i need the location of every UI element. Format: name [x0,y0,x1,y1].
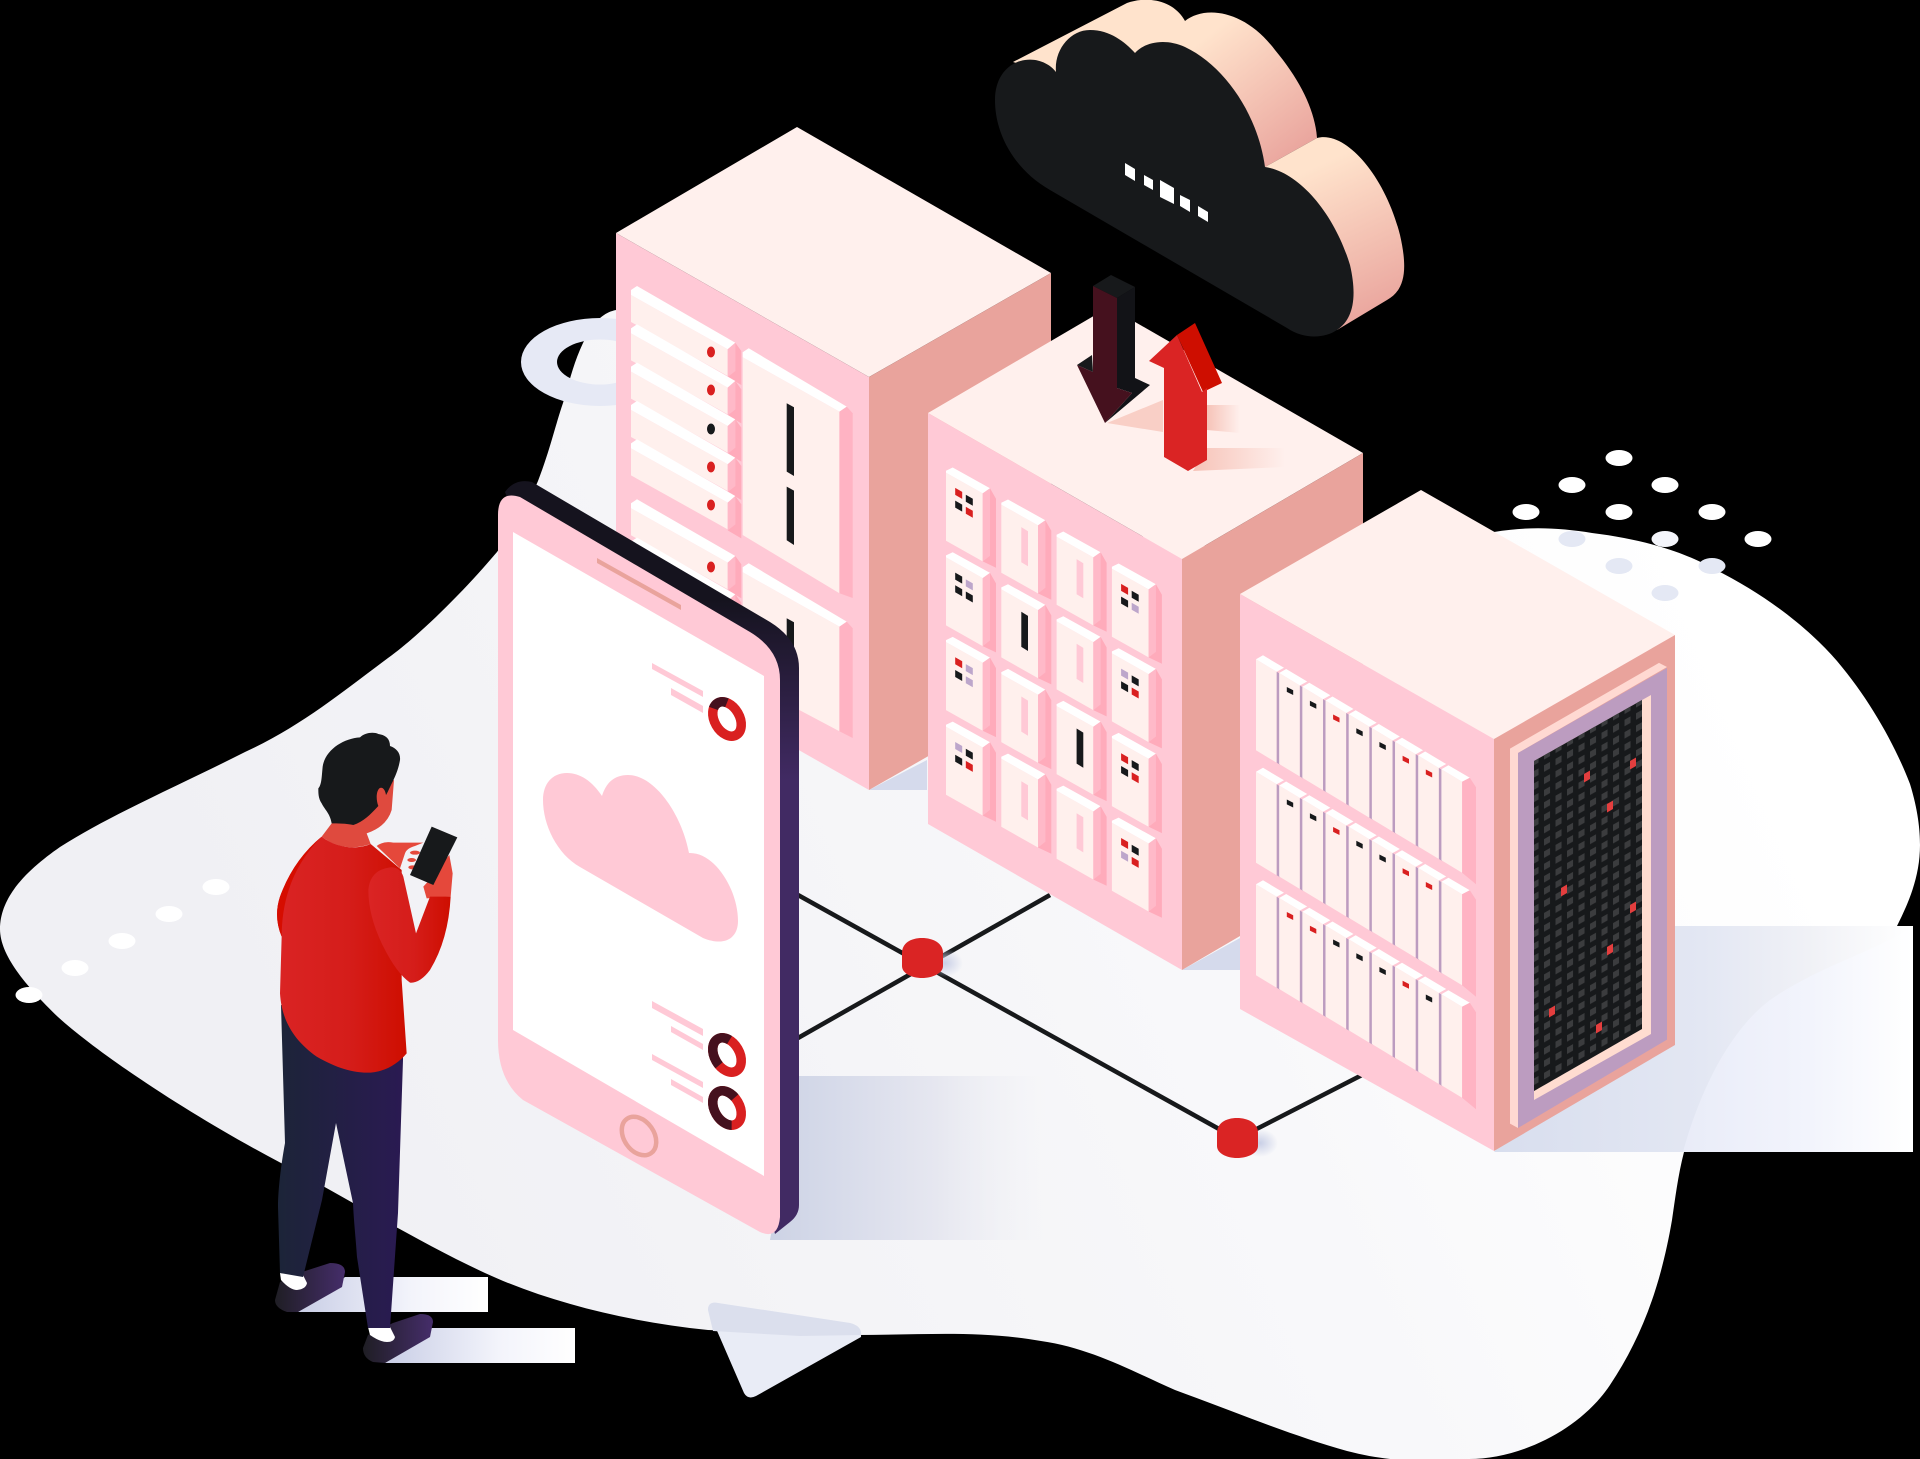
torso [277,837,407,1073]
arm sleeve [368,867,451,983]
hair [318,733,400,825]
person legs [278,1005,403,1328]
node 1 [902,938,943,978]
node shadows [927,949,1278,1157]
arrow shadows [1107,400,1285,471]
tablet dark side [505,481,799,1234]
person [275,733,457,1363]
rack 2 module grid [946,468,1162,918]
ground shadows [298,760,1913,1363]
dots: left [16,879,230,1003]
dots: top right [1512,450,1772,601]
network lines [798,895,1362,1139]
background blob [0,310,1920,1459]
phone [410,827,457,885]
tablet home button [615,1110,663,1162]
neck and head skin [322,780,394,847]
arrow up [1149,323,1222,471]
tablet list row 1 [652,663,747,741]
tablet body [498,495,780,1234]
person upper body [277,733,457,1073]
node 2 [1217,1118,1258,1158]
tablet list row 2 [652,1001,747,1077]
arrow down [1077,275,1150,423]
torso shade [277,837,322,937]
door red lights [1549,758,1636,1034]
person left sock [280,1273,307,1290]
front hand [423,855,453,898]
rack 3 blade lights [1287,687,1432,1003]
tablet [498,481,799,1234]
cloud upper side [1013,0,1317,167]
cloud [995,0,1404,337]
cloud front [995,30,1354,336]
speech triangle [708,1303,861,1397]
rack 1 lower panel [743,563,853,738]
rack 1 drawers group 1 [631,286,741,538]
rack 1 status lights [707,346,715,572]
rack 3 door [1510,663,1667,1128]
server rack 3 [1240,490,1675,1151]
server rack 1 [616,127,1051,790]
cloud lower side [1265,137,1404,330]
network nodes [902,938,1278,1158]
tablet cloud [543,773,738,942]
person right sock [368,1327,395,1342]
server rack 2 [928,307,1363,970]
tablet speaker [597,558,681,610]
rack 1 drawers group 2 [631,499,741,752]
person right shoe [363,1314,433,1363]
ring decoration [521,318,679,406]
tablet screen [513,532,764,1176]
cloud indicator lights [1125,163,1208,222]
rack 1 large panel [743,348,853,598]
person left shoe [275,1263,345,1312]
hand with fingers [377,842,423,869]
tablet list row 3 [652,1054,747,1130]
rack 3 blade rows [1256,655,1476,1109]
